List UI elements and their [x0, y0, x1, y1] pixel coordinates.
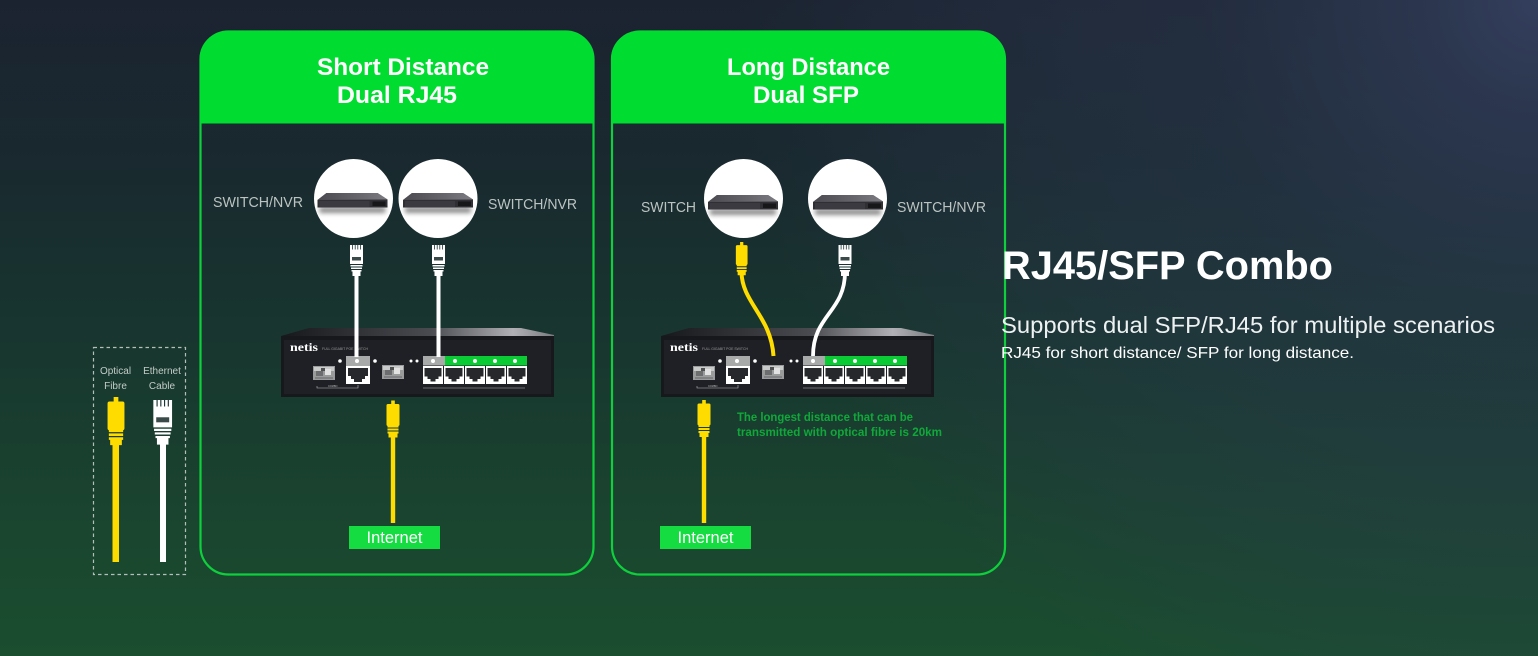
panel outline: [200, 32, 594, 574]
subtitle: Supports dual SFP/RJ45 for multiple scenarios: [1001, 312, 1495, 338]
panel header: [199, 31, 594, 124]
label: switch/nvr: SWITCH/NVR: [897, 199, 986, 216]
icon: right device: [398, 159, 478, 238]
switch: FULL GIGABIT POE SWITCH: [702, 347, 748, 351]
label: optical fibre: Optical: [100, 366, 131, 377]
internet label: Internet: [367, 529, 423, 547]
note: transmission distance: transmitted with optical fibre is 20km: [737, 427, 942, 439]
panel: short distance: [199, 31, 594, 574]
internet label: [660, 526, 751, 549]
icon: left device: [314, 159, 393, 238]
legend: cable types: [94, 348, 186, 574]
heading: Long Distance: [727, 54, 890, 81]
panel outline: [612, 32, 1005, 574]
heading: Dual SFP: [753, 82, 859, 109]
switch: netis: [670, 342, 699, 354]
switch: netis: [290, 342, 319, 354]
description: RJ45 for short distance/ SFP for long distance.: [1001, 345, 1354, 362]
icon: switch/nvr device: [808, 159, 887, 238]
icon: switch device: [704, 159, 783, 238]
switch: [661, 328, 934, 397]
icon: ethernet cable: [153, 400, 172, 562]
internet label: Internet: [678, 529, 734, 547]
switch: COMBO: [328, 385, 338, 388]
panel header: [611, 31, 1006, 124]
switch: COMBO: [708, 385, 718, 388]
icon: optical fibre cable: [108, 397, 124, 562]
ethernet cable 2: [432, 245, 445, 357]
title: RJ45/SFP Combo: [1002, 244, 1333, 288]
switch: FULL GIGABIT POE SWITCH: [322, 347, 368, 351]
internet label: [349, 526, 440, 549]
label: switch: SWITCH: [641, 199, 696, 216]
heading: Short Distance: [317, 54, 489, 81]
panel: long distance: [611, 31, 1006, 574]
label: switch/nvr left: SWITCH/NVR: [213, 194, 303, 211]
ethernet cable, curved: [813, 245, 852, 356]
note: transmission distance: The longest distance that can be: [737, 412, 913, 424]
label: switch/nvr right: SWITCH/NVR: [488, 196, 577, 213]
label: optical fibre: Fibre: [104, 381, 127, 392]
label: ethernet cable: Ethernet: [143, 366, 181, 377]
label: ethernet cable: Cable: [149, 381, 175, 392]
optical fibre cable, curved: [736, 242, 774, 356]
optical fibre cable: [386, 400, 400, 523]
switch: [281, 328, 554, 397]
optical fibre cable: [698, 400, 710, 523]
heading: Dual RJ45: [337, 82, 457, 109]
ethernet cable 1: [350, 245, 363, 357]
